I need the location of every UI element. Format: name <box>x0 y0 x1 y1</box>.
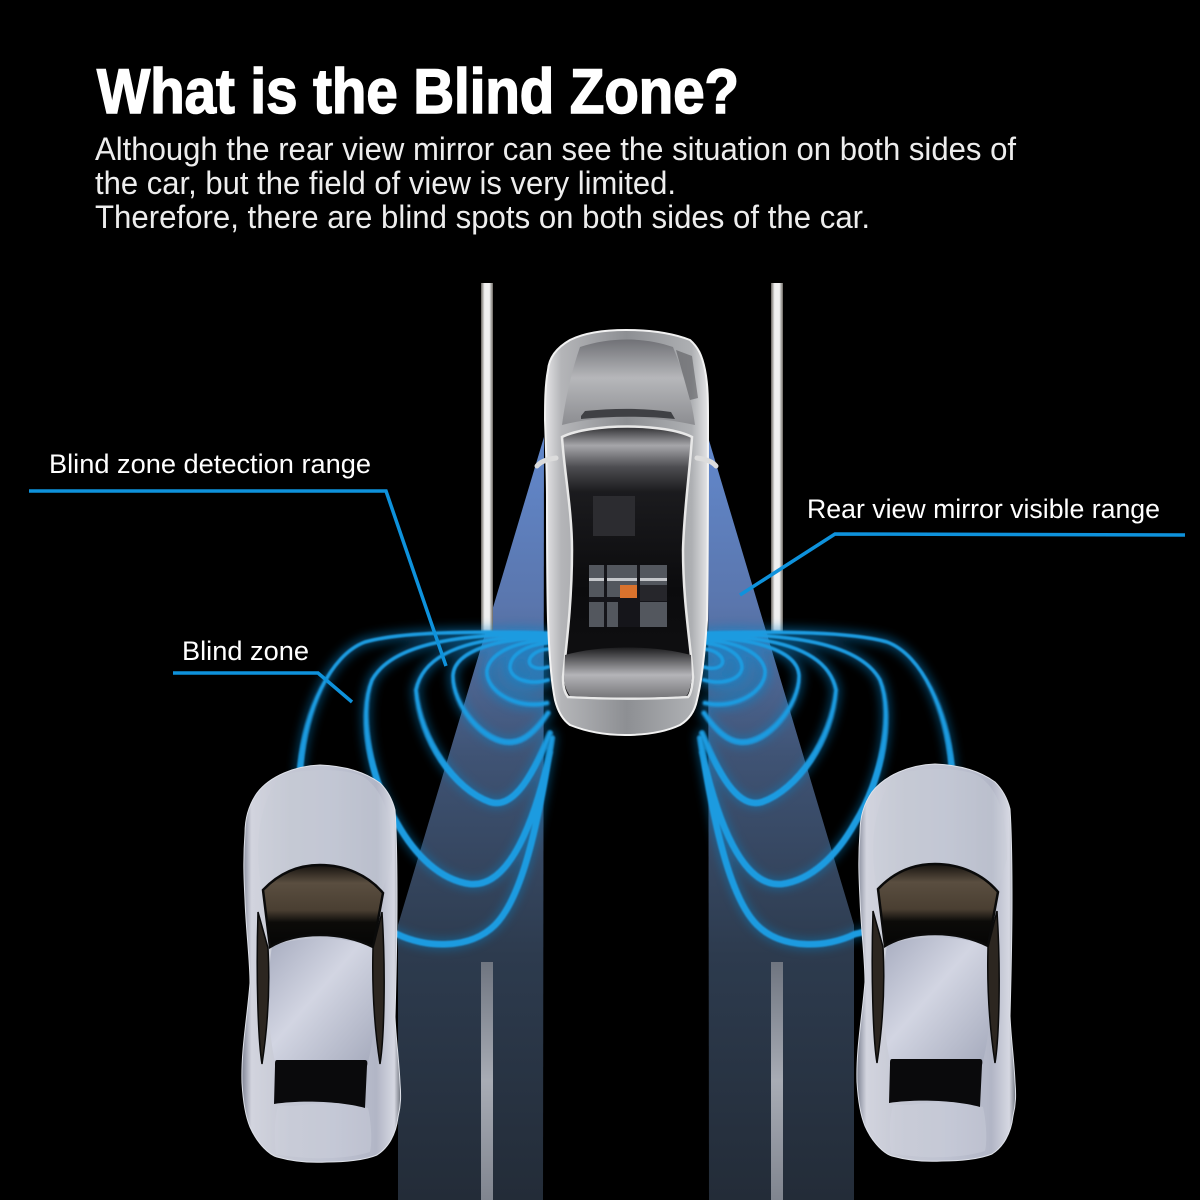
cabin glass and roof <box>562 426 693 698</box>
car: centre <box>537 330 716 735</box>
description text: the car, but the field of view is very limited. <box>95 165 676 201</box>
lane line: lower right <box>771 962 783 1200</box>
orange reflection <box>620 585 637 598</box>
rear window highlight <box>564 648 692 698</box>
right mirror <box>697 458 716 466</box>
description text: Therefore, there are blind spots on both sides of the car. <box>95 199 870 235</box>
left mirror <box>537 458 556 466</box>
roof reflection: upper <box>593 496 635 536</box>
leader line: blind zone detection range <box>29 491 446 666</box>
roof reflection: lower <box>589 565 667 627</box>
car: lower right <box>857 764 1016 1161</box>
road: right rear-view beam <box>708 437 854 1200</box>
road: left rear-view beam <box>398 437 544 1200</box>
leader line: rear view mirror visible range <box>740 534 1185 595</box>
car body <box>545 330 708 735</box>
leader line: blind zone <box>173 673 352 702</box>
label: rear view mirror visible range: Rear view mirror visible range <box>807 494 1160 524</box>
detection waves: right side <box>700 632 952 944</box>
detection waves: left side <box>300 632 552 944</box>
description text <box>95 131 1016 235</box>
hood vent <box>581 409 675 419</box>
label: blind zone: Blind zone <box>182 636 309 666</box>
label: blind zone detection range: Blind zone detection range <box>49 449 371 479</box>
title: What is the Blind Zone? <box>97 57 739 127</box>
hood panel <box>562 340 695 425</box>
car: lower left <box>242 765 401 1162</box>
lane line: upper right <box>771 283 783 633</box>
lane line: lower left <box>481 962 493 1200</box>
description text: Although the rear view mirror can see the situation on both sides of <box>95 131 1016 167</box>
hood dark strip <box>676 350 698 400</box>
lane line: upper left <box>481 283 493 633</box>
